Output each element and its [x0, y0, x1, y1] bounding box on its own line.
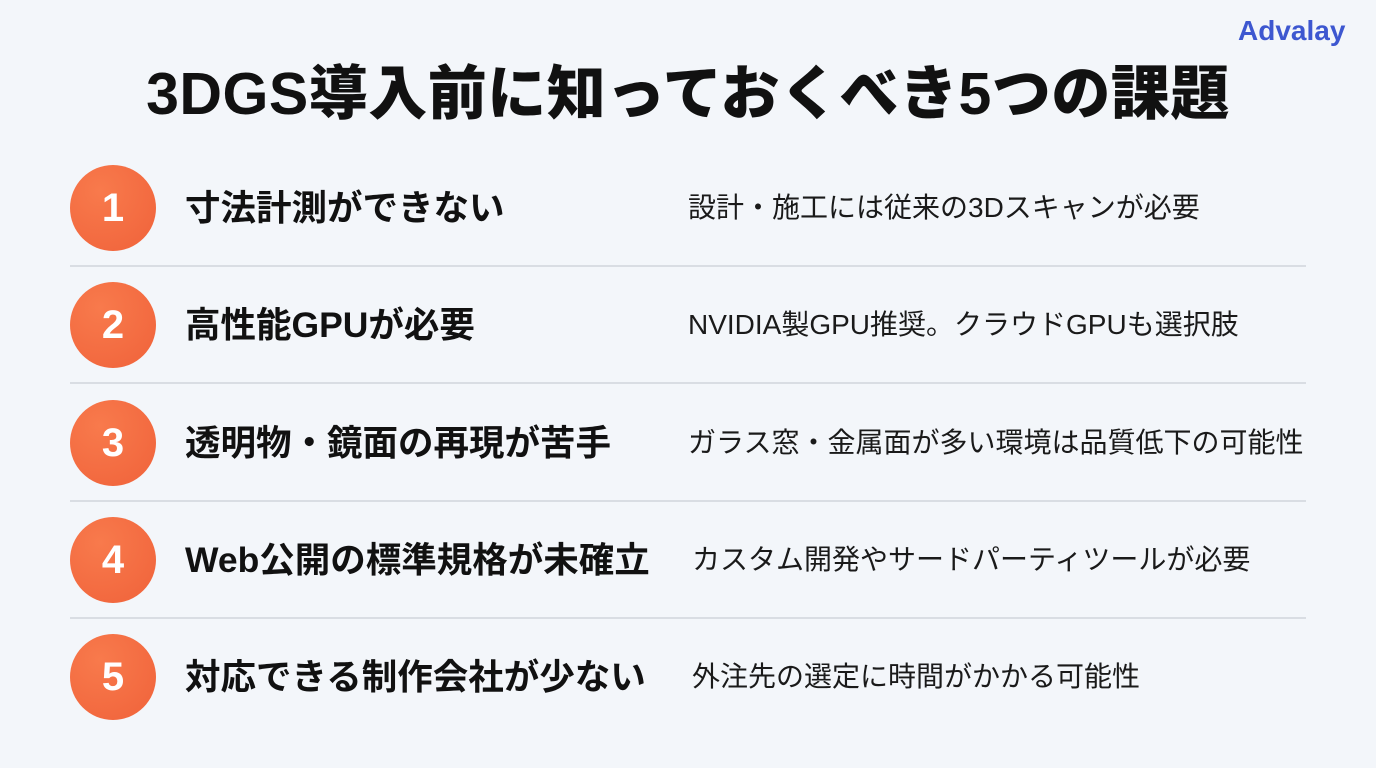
description 2: NVIDIA製GPU推奨。クラウドGPUも選択肢	[688, 309, 1239, 340]
badge 5	[70, 634, 156, 720]
item 2	[70, 282, 1239, 368]
badge 1	[70, 165, 156, 251]
badge 2: 2	[102, 303, 124, 347]
description 3: ガラス窓・金属面が多い環境は品質低下の可能性	[688, 427, 1303, 458]
title: 3DGS導入前に知っておくべき5つの課題	[146, 61, 1230, 127]
badge 3: 3	[102, 421, 124, 465]
badge 4: 4	[102, 538, 124, 582]
item 4	[70, 517, 1250, 603]
heading 3: 透明物・鏡面の再現が苦手	[185, 423, 611, 463]
badge 2	[70, 282, 156, 368]
item 1	[70, 165, 1200, 251]
heading 4: Web公開の標準規格が未確立	[185, 540, 650, 580]
description 5: 外注先の選定に時間がかかる可能性	[692, 661, 1140, 692]
heading 2: 高性能GPUが必要	[185, 305, 475, 345]
heading 5: 対応できる制作会社が少ない	[185, 657, 646, 697]
badge 1: 1	[102, 186, 124, 230]
badge 5: 5	[102, 655, 124, 699]
heading 1: 寸法計測ができない	[185, 188, 505, 228]
description 1: 設計・施工には従来の3Dスキャンが必要	[688, 192, 1200, 223]
badge 4	[70, 517, 156, 603]
badge 3	[70, 400, 156, 486]
description 4: カスタム開発やサードパーティツールが必要	[692, 544, 1250, 575]
item 3	[70, 400, 1303, 486]
item 5	[70, 634, 1140, 720]
logo: Advalay	[1238, 15, 1345, 46]
